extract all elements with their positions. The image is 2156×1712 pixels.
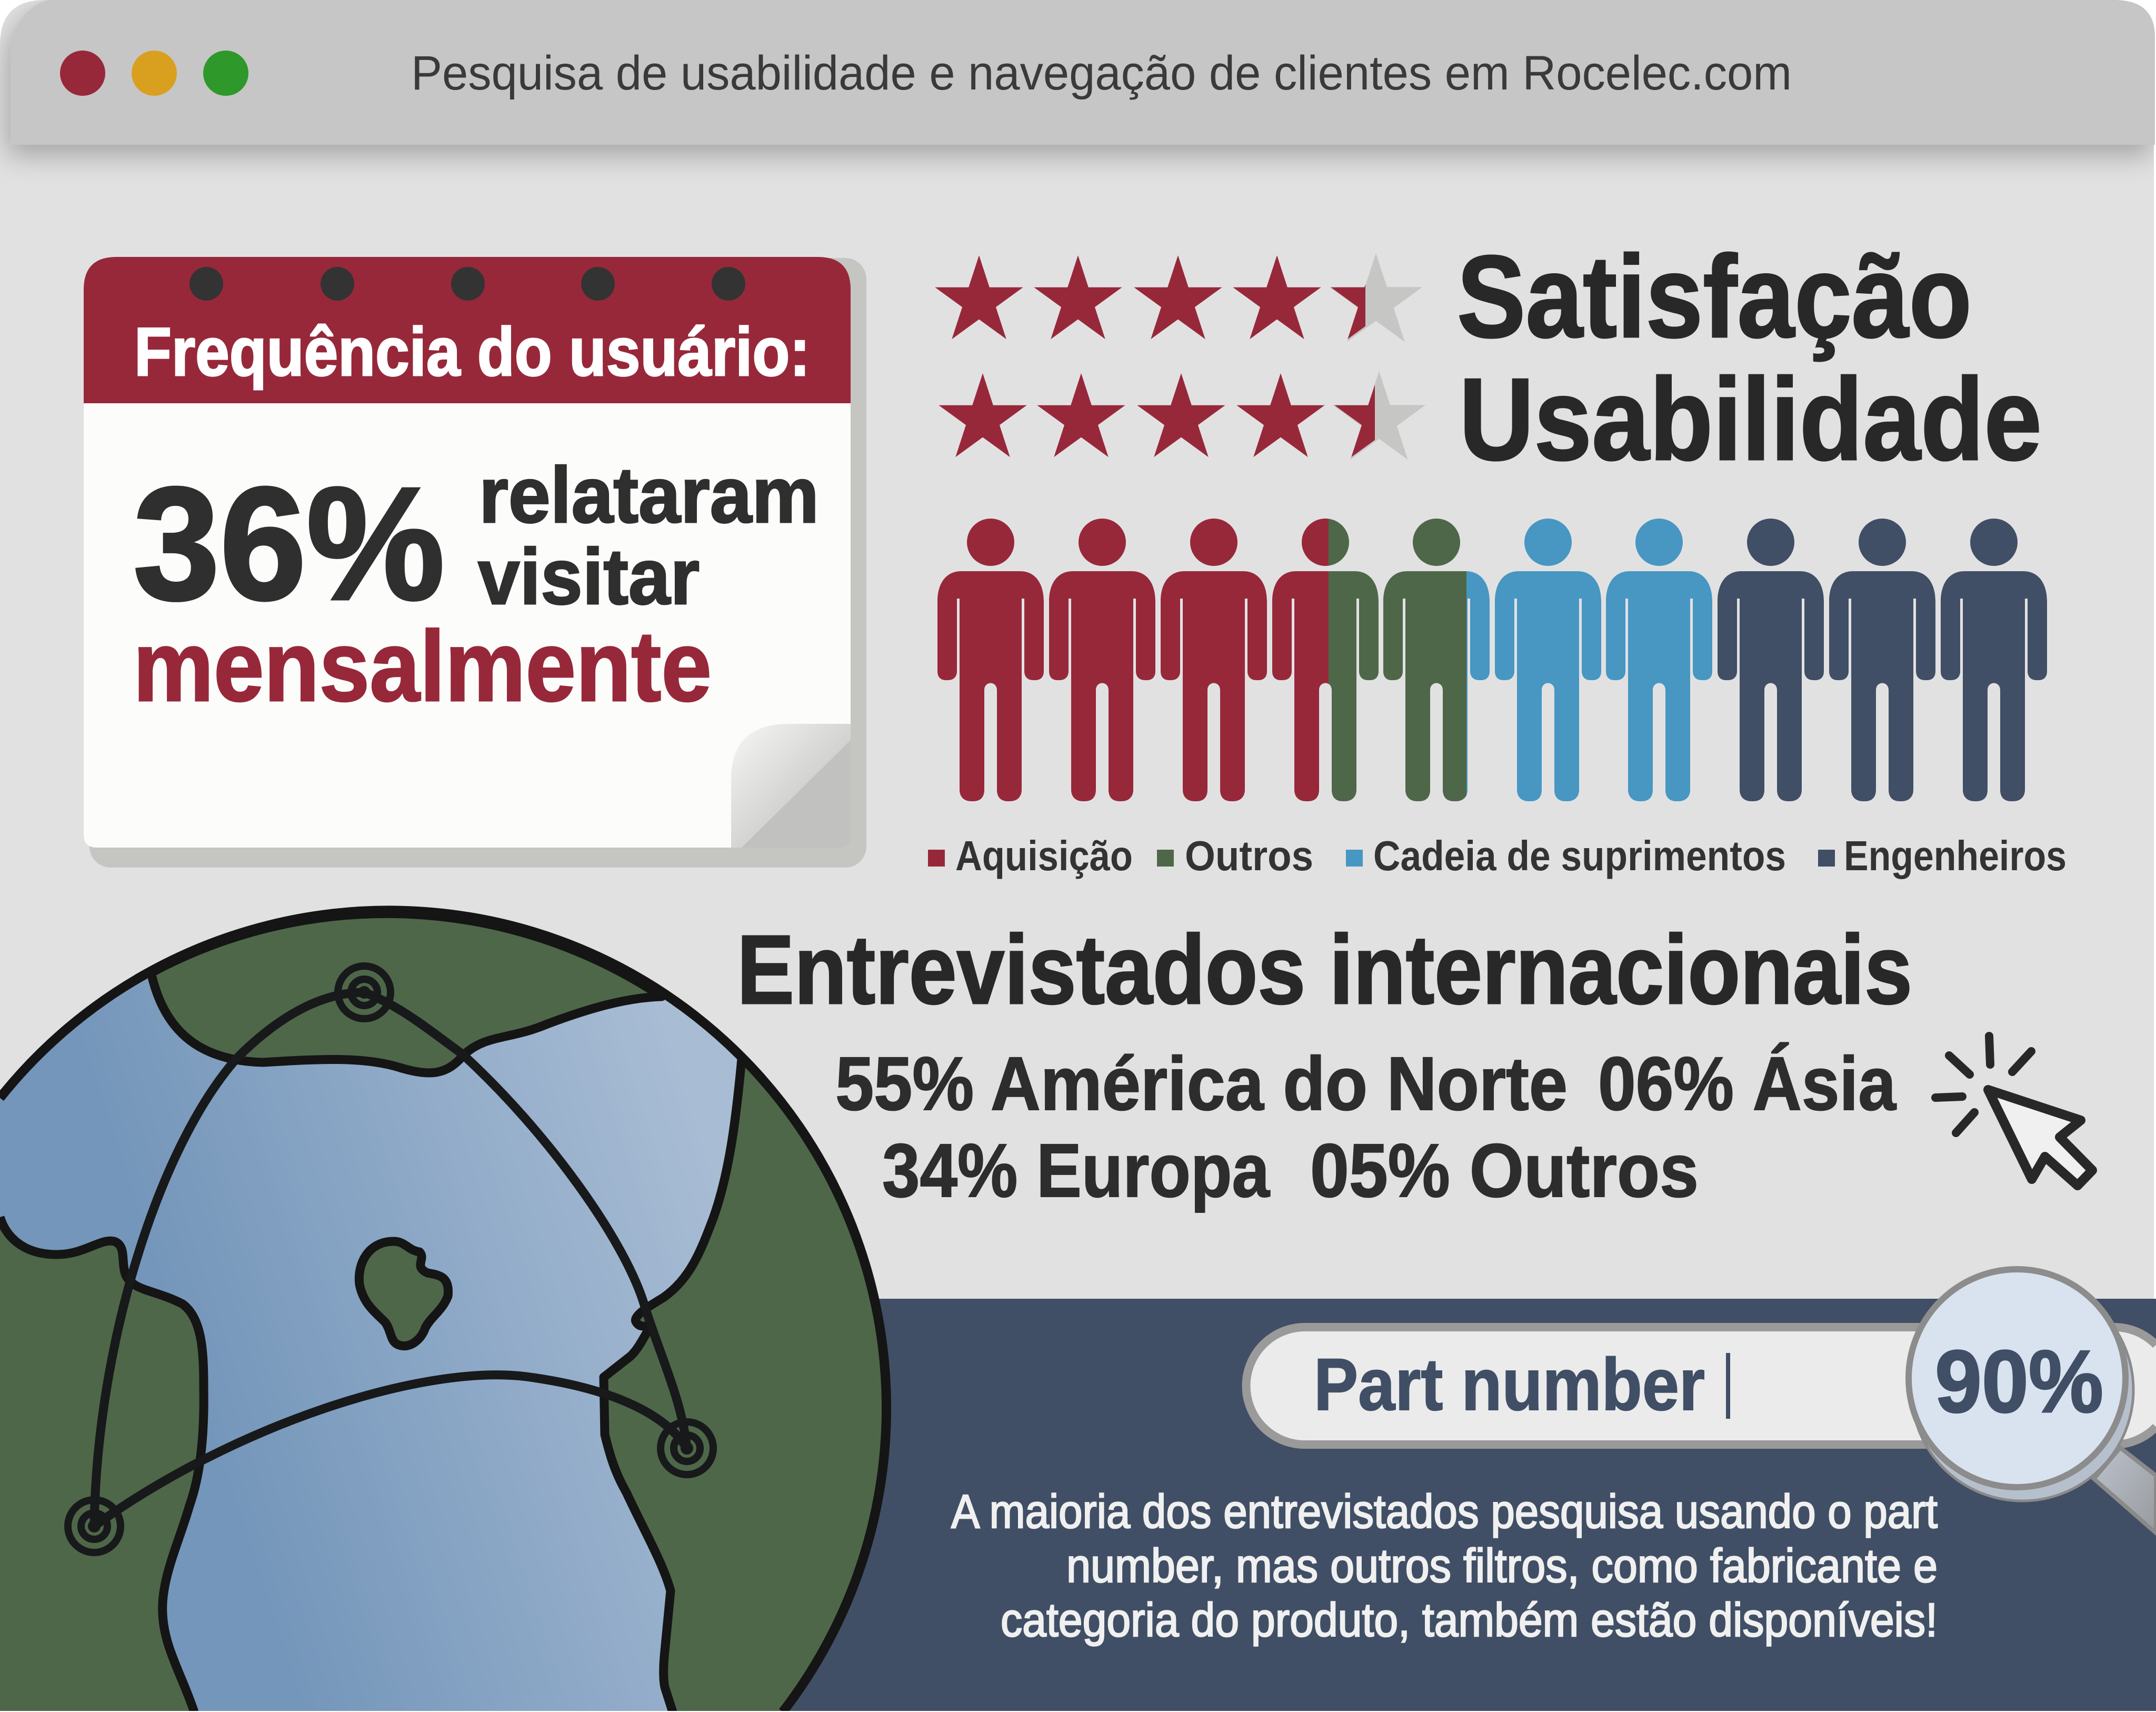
panel: calendar: [84, 257, 866, 868]
regional statistics: [835, 1041, 1897, 1213]
body text: categoria do produto, também estão disponíveis!: [1001, 1594, 1938, 1647]
calendar heading: Frequência do usuário:: [134, 313, 810, 390]
statistic 36%: 36%: [133, 454, 445, 633]
pictogram: ten people by role: [937, 519, 2047, 801]
globe illustration: [0, 910, 886, 1712]
stars: usability: [939, 371, 1425, 460]
search text: Part number: [1314, 1343, 1705, 1426]
body text: number, mas outros filtros, como fabricante e: [1066, 1540, 1938, 1592]
window button: red: [60, 51, 105, 96]
heading: international respondents: Entrevistados internacionais: [737, 915, 1912, 1024]
regional statistics: 05% Outros: [1310, 1128, 1699, 1213]
heading: Satisfação: Satisfação: [1457, 232, 1972, 362]
location marker: east: [661, 1422, 713, 1475]
text: visitar: visitar: [478, 532, 700, 621]
migration routes: [94, 992, 687, 1526]
page title: Pesquisa de usabilidade e navegação de clientes em Rocelec.com: [411, 46, 1792, 100]
lens rim: [1911, 1279, 2133, 1501]
magnifier handle: [2094, 1448, 2156, 1533]
heading: Usabilidade: Usabilidade: [1459, 354, 2042, 485]
north land mass: [151, 913, 662, 1073]
browser title bar: [7, 0, 2155, 155]
east land mass: [604, 1059, 885, 1712]
regional statistics: 34% Europa: [882, 1128, 1270, 1213]
location marker: north: [338, 966, 391, 1019]
body text: [951, 1486, 1938, 1647]
satisfaction rating row: [935, 232, 1972, 362]
page curl: [731, 724, 851, 848]
legend: Cadeia de suprimentos: [1373, 832, 1786, 879]
usability rating row: [939, 372, 2039, 462]
panel: dark search section background: [684, 1299, 2156, 1711]
statistic 90%: 90%: [1935, 1332, 2103, 1431]
location marker: west: [68, 1500, 121, 1552]
regional statistics: 06% Ásia: [1598, 1041, 1897, 1126]
central island: [359, 1241, 448, 1346]
body text: A maioria dos entrevistados pesquisa usando o part: [951, 1486, 1938, 1538]
west land mass: [0, 1217, 204, 1712]
lens: [1909, 1269, 2125, 1487]
stars: satisfaction: [935, 253, 1422, 342]
legend: [928, 832, 2067, 879]
regional statistics: 55% América do Norte: [835, 1041, 1568, 1126]
legend: Outros: [1185, 832, 1313, 879]
icon: mouse cursor click: [1935, 1036, 2092, 1186]
text: relataram: relataram: [479, 451, 819, 539]
magnifying glass with 90%: [1909, 1269, 2156, 1533]
legend: Aquisição: [955, 832, 1133, 879]
window button: orange: [132, 51, 177, 96]
text: mensalmente: mensalmente: [133, 611, 712, 722]
calendar binding holes: [189, 267, 745, 301]
legend: Engenheiros: [1844, 832, 2067, 879]
window button: green: [203, 51, 248, 96]
search bar: [1246, 1327, 2156, 1445]
calendar header: [84, 257, 851, 403]
text caret: [1726, 1353, 1730, 1419]
